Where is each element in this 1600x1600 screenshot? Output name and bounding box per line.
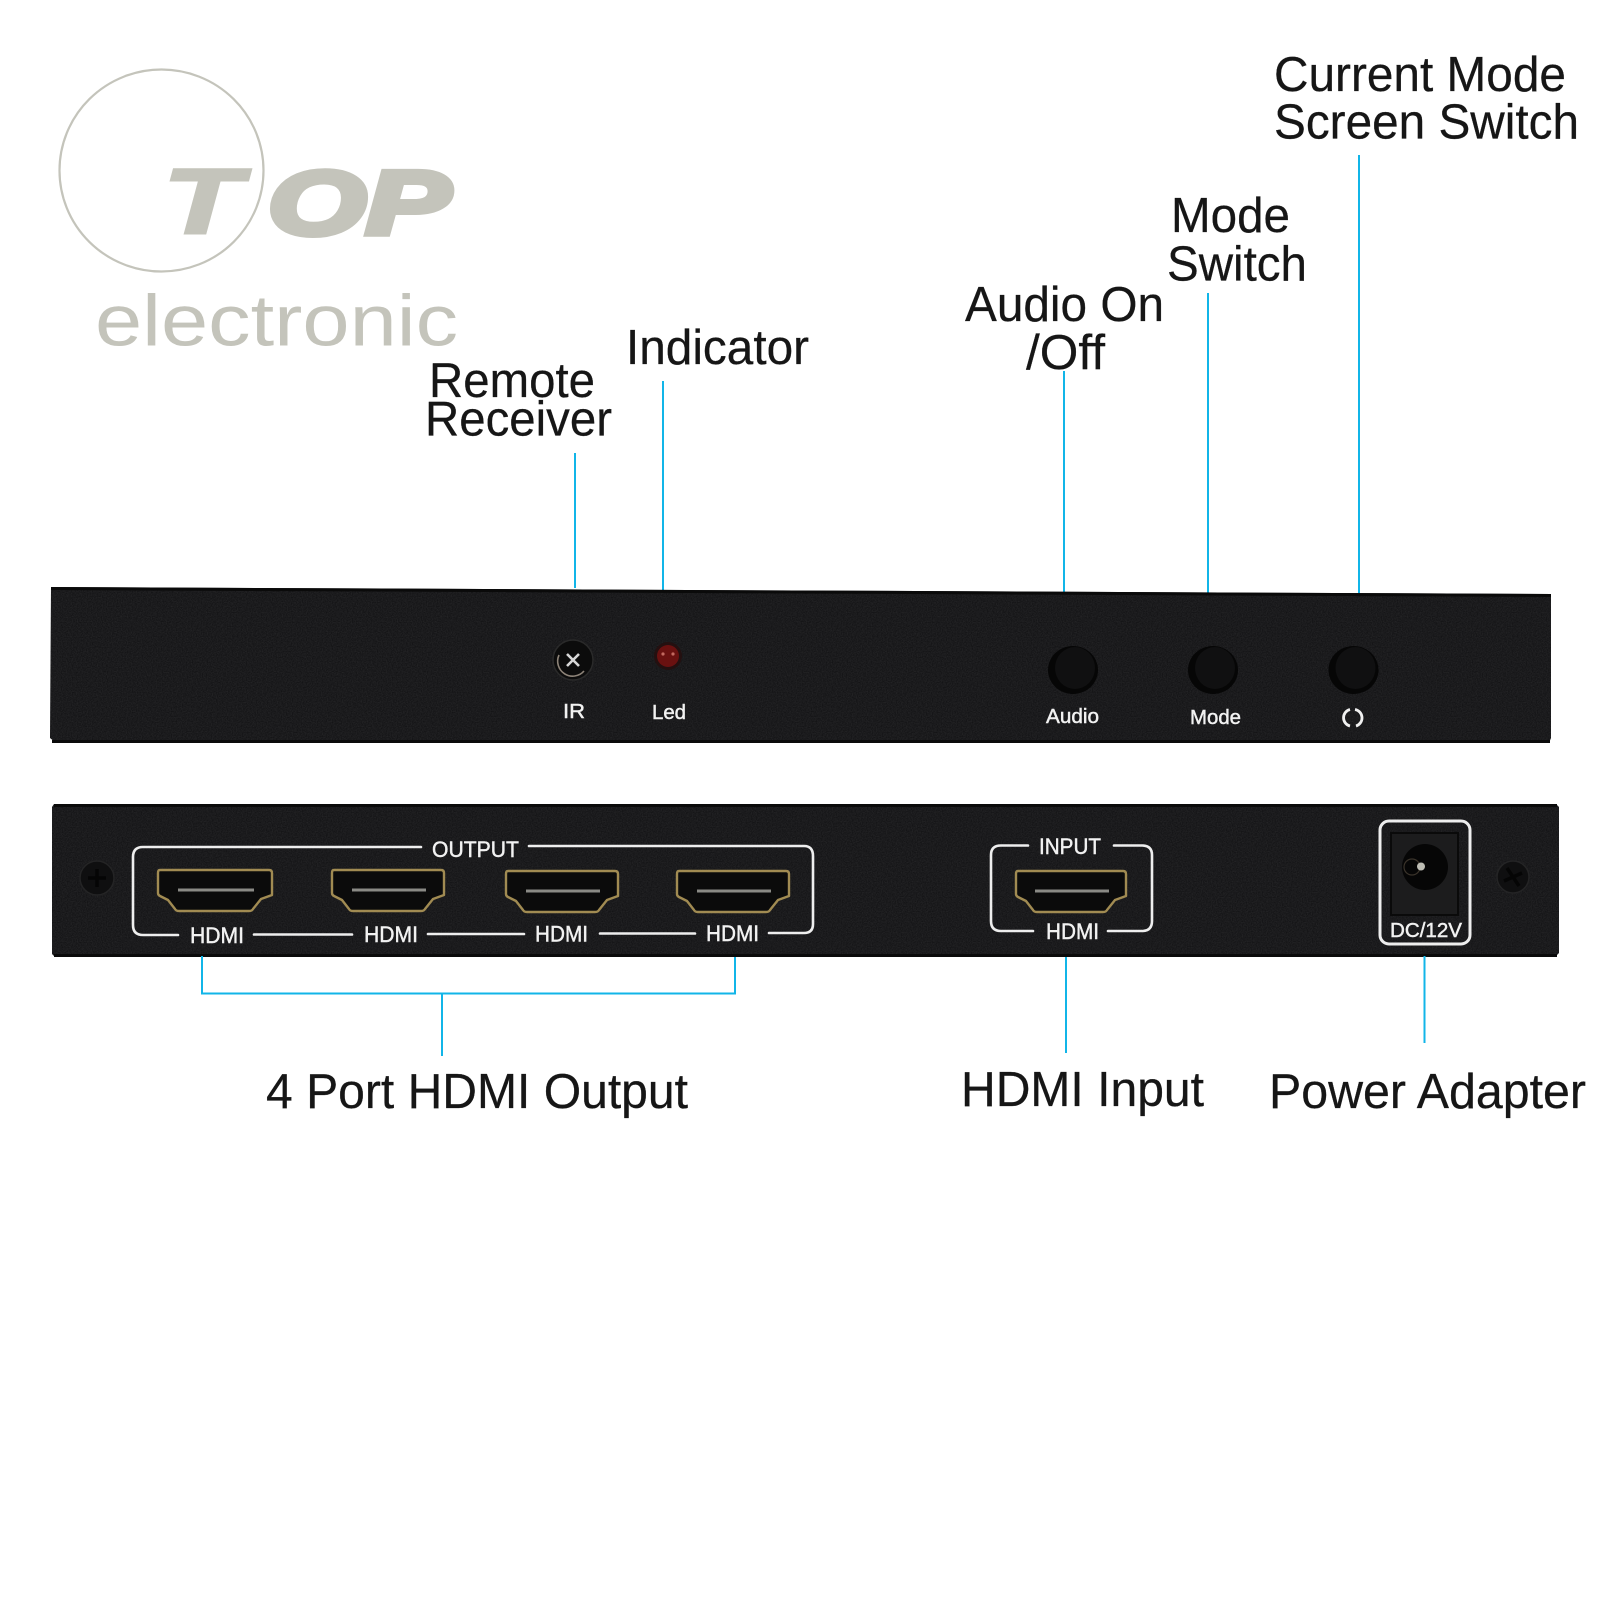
Mode label: Mode <box>1190 707 1241 729</box>
leader line: Mode <box>1207 293 1209 593</box>
Audio label: Audio <box>1046 706 1099 728</box>
HDMI output labels: HDMI <box>535 922 588 946</box>
power jack <box>1380 821 1470 944</box>
HDMI output port 3 <box>506 871 618 912</box>
HDMI output labels: HDMI <box>706 921 759 946</box>
label: Current Mode Screen Switch: Current Mode <box>1274 48 1566 102</box>
logo: TOP electronic <box>60 70 458 362</box>
label: Audio On /Off <box>965 278 1164 380</box>
label: 4 Port HDMI Output: 4 Port HDMI Output <box>266 1065 688 1119</box>
panel: back of device <box>52 804 1559 957</box>
button: screen switch <box>1328 646 1378 694</box>
panel: front of device <box>50 587 1552 744</box>
leader line: Remote Receiver <box>574 453 576 588</box>
logo word electronic: electronic <box>95 282 458 362</box>
LED indicator <box>654 642 682 670</box>
logo letter T: T <box>163 151 250 253</box>
output frame <box>133 846 813 935</box>
INPUT label: INPUT <box>1039 834 1101 859</box>
OUTPUT label: OUTPUT <box>432 837 519 862</box>
leader line: Audio <box>1063 371 1065 593</box>
IR receiver <box>553 640 593 680</box>
label: Mode Switch: Mode <box>1171 189 1290 243</box>
HDMI output labels <box>190 921 759 948</box>
screw left <box>80 861 114 895</box>
HDMI output port 2 <box>332 870 444 911</box>
leader line: Indicator <box>662 381 664 591</box>
HDMI input port <box>1016 871 1126 912</box>
label: Remote Receiver: Receiver <box>425 392 612 446</box>
label: Current Mode Screen Switch <box>1274 48 1579 150</box>
HDMI output port 1 <box>158 870 272 911</box>
bracket: 4 port HDMI output <box>202 956 735 1056</box>
label: Mode Switch: Switch <box>1167 238 1307 292</box>
leader line: Current Mode <box>1358 155 1360 596</box>
label: Audio On /Off: Audio On <box>965 278 1164 332</box>
HDMI output port 4 <box>677 871 789 912</box>
button: Audio <box>1048 646 1098 694</box>
IR label: IR <box>563 701 585 723</box>
label: Current Mode Screen Switch: Screen Switch <box>1274 96 1579 150</box>
screw right <box>1497 861 1529 893</box>
HDMI input label: HDMI <box>1046 919 1099 944</box>
logo letters OP: OP <box>268 154 451 254</box>
label: Power Adapter: Power Adapter <box>1269 1065 1586 1119</box>
HDMI output labels: HDMI <box>364 922 418 947</box>
HDMI output labels: HDMI <box>190 923 244 948</box>
label: Audio On /Off: /Off <box>1026 326 1105 380</box>
label: Indicator: Indicator <box>626 321 809 375</box>
icon: cycle arrows <box>1344 710 1362 726</box>
label: Mode Switch <box>1167 189 1307 292</box>
label: Remote Receiver: Remote <box>429 354 595 408</box>
button: Mode <box>1188 646 1238 694</box>
input frame <box>991 846 1152 931</box>
leader line: HDMI Input <box>1065 957 1067 1053</box>
label: Remote Receiver <box>425 354 612 446</box>
LED label: Led <box>652 702 686 724</box>
logo circle <box>60 70 264 272</box>
leader line: Power Adapter <box>1424 956 1426 1043</box>
label: HDMI Input: HDMI Input <box>961 1063 1204 1117</box>
DC/12V label: DC/12V <box>1390 920 1463 942</box>
